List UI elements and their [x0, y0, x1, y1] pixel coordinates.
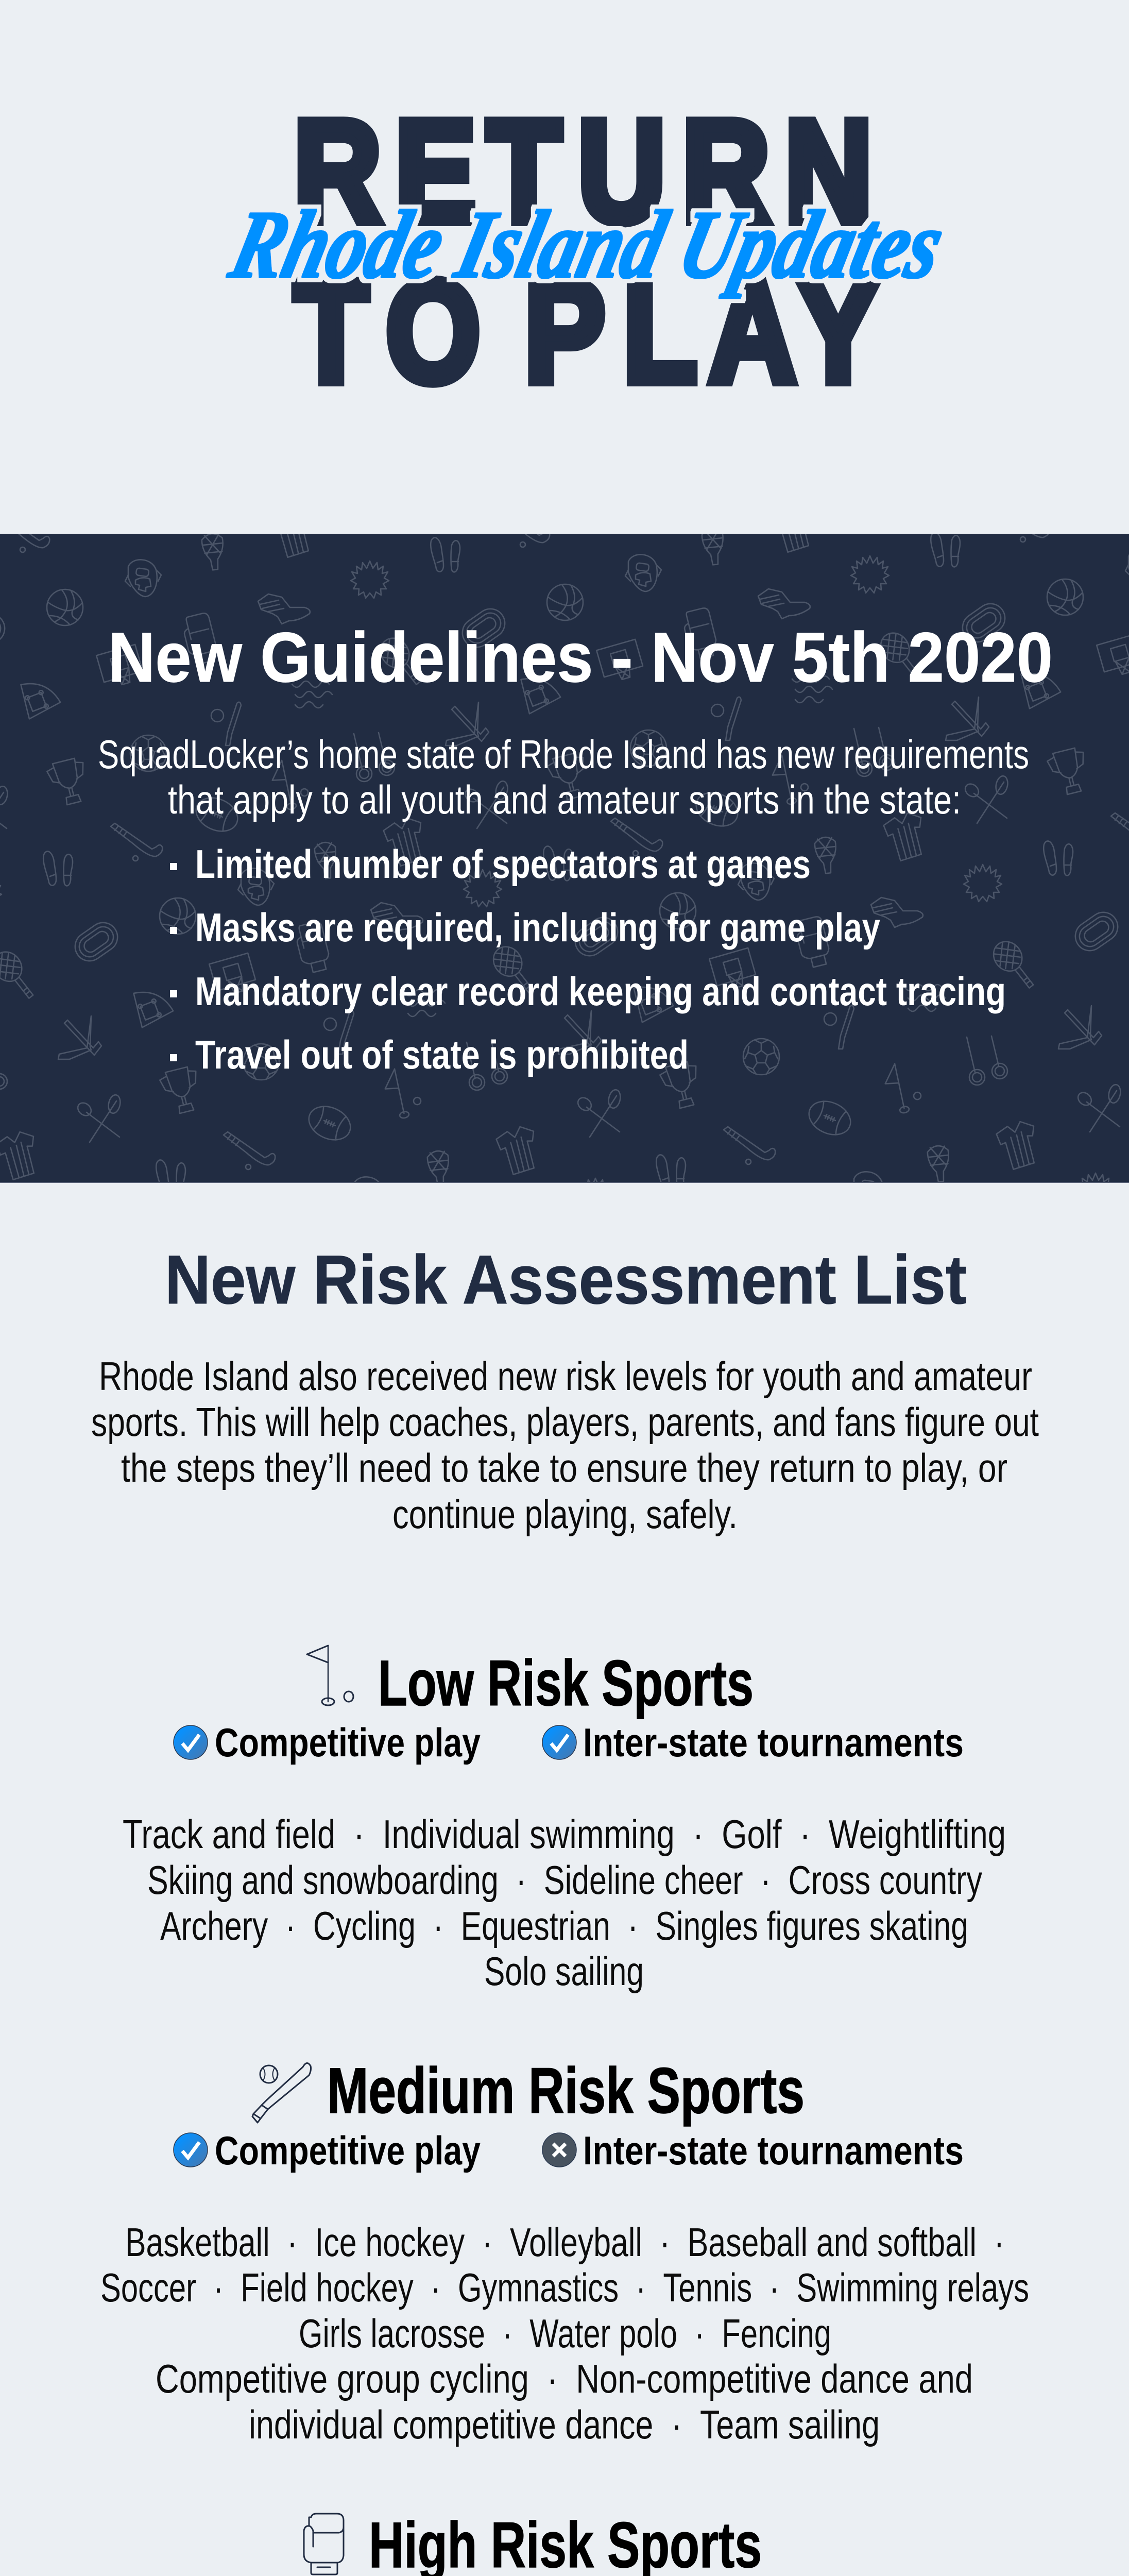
heading: medium risk sports: Medium Risk Sports — [327, 2055, 805, 2127]
text block: risk intro: continue playing, safely. — [392, 1492, 738, 1537]
panel: new guidelines band — [0, 534, 1129, 1183]
status: competitive play allowed: Competitive play — [215, 2128, 481, 2173]
panel: medium risk sports — [100, 2055, 1029, 2447]
bullet list — [170, 841, 1006, 1077]
list: medium risk sports: Girls lacrosse · Water polo · Fencing — [299, 2311, 831, 2356]
title: TO PLAY: TO PLAY — [294, 251, 879, 412]
icon: golf flag — [307, 1646, 353, 1705]
icon: baseball and bat — [252, 2063, 311, 2123]
heading: low risk sports: Low Risk Sports — [378, 1648, 754, 1719]
list: medium risk sports: individual competitive dance · Team sailing — [249, 2402, 880, 2447]
intro paragraph — [98, 732, 1029, 822]
list: low risk sports: Solo sailing — [484, 1948, 644, 1994]
icon: boxing glove — [304, 2514, 344, 2574]
status: inter-state tournaments not allowed: Inter-state tournaments — [583, 2128, 964, 2173]
panel: high risk sports — [95, 2510, 1035, 2576]
heading: new risk assessment list: New Risk Assessment List — [165, 1242, 967, 1318]
list: low risk sports — [123, 1811, 1006, 1994]
text block: risk intro — [91, 1353, 1039, 1537]
status: inter-state tournaments allowed: Inter-state tournaments — [583, 1720, 964, 1765]
title block — [221, 91, 954, 412]
title: RETURN: RETURN — [294, 91, 873, 252]
list: medium risk sports — [100, 2219, 1029, 2447]
heading: new guidelines: New Guidelines - Nov 5th 2020 — [108, 618, 1053, 697]
panel: low risk sports — [123, 1646, 1006, 1994]
bullet list: Limited number of spectators at games — [195, 841, 811, 887]
status: competitive play allowed: Competitive play — [215, 1720, 481, 1765]
intro paragraph: that apply to all youth and amateur sports in the state: — [168, 777, 961, 822]
bullet list: Masks are required, including for game play — [195, 905, 880, 950]
bullet list: Travel out of state is prohibited — [195, 1032, 689, 1077]
script subtitle: Rhode Island Updates: Rhode Island Updates — [221, 191, 954, 299]
